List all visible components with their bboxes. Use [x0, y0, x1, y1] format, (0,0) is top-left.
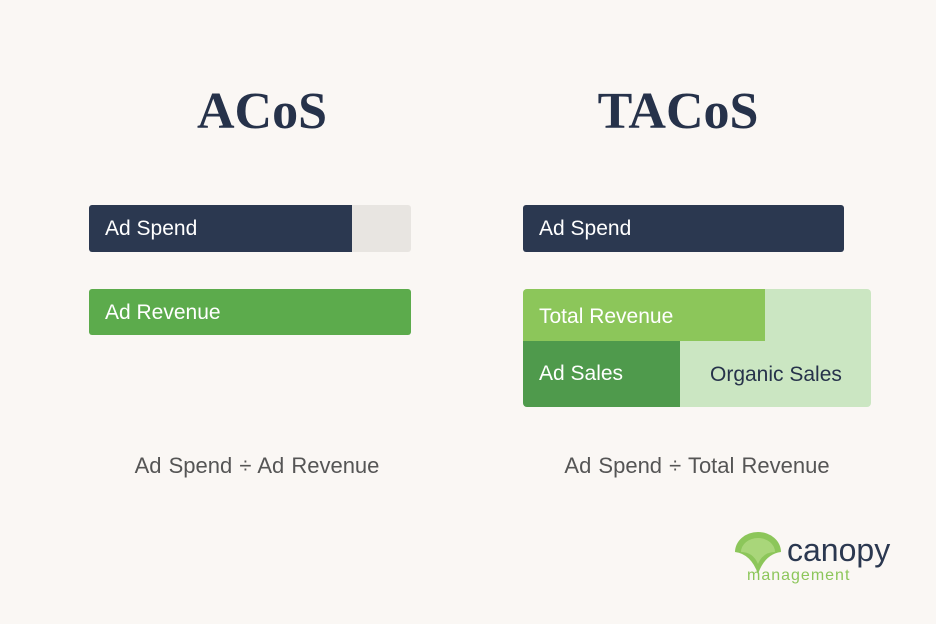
ACoS formula: Ad Spend ÷ Ad Revenue: [135, 453, 379, 478]
total revenue bar: Total Revenue: [539, 305, 673, 328]
TACoS ad spend bar: [523, 205, 844, 252]
title: TACoS: TACoS: [598, 83, 758, 140]
TACoS formula: Ad Spend ÷ Total Revenue: [564, 453, 830, 478]
ACoS ad spend bar: [89, 205, 411, 252]
ACoS ad revenue bar: Ad Revenue: [105, 301, 221, 324]
ACoS ad revenue bar: [89, 289, 411, 335]
icon: canopy leaf: [735, 532, 781, 574]
logo: [735, 532, 890, 584]
title: ACoS: ACoS: [197, 83, 327, 140]
TACoS revenue block: [523, 289, 871, 407]
ACoS ad spend bar: Ad Spend: [105, 217, 197, 240]
logo text: canopy: [787, 532, 890, 568]
organic sales: Organic Sales: [710, 363, 842, 386]
ad sales: Ad Sales: [539, 362, 623, 385]
logo: management: [747, 567, 850, 584]
TACoS ad spend bar: Ad Spend: [539, 217, 631, 240]
ad sales: [523, 341, 680, 407]
total revenue bar: [523, 289, 765, 341]
